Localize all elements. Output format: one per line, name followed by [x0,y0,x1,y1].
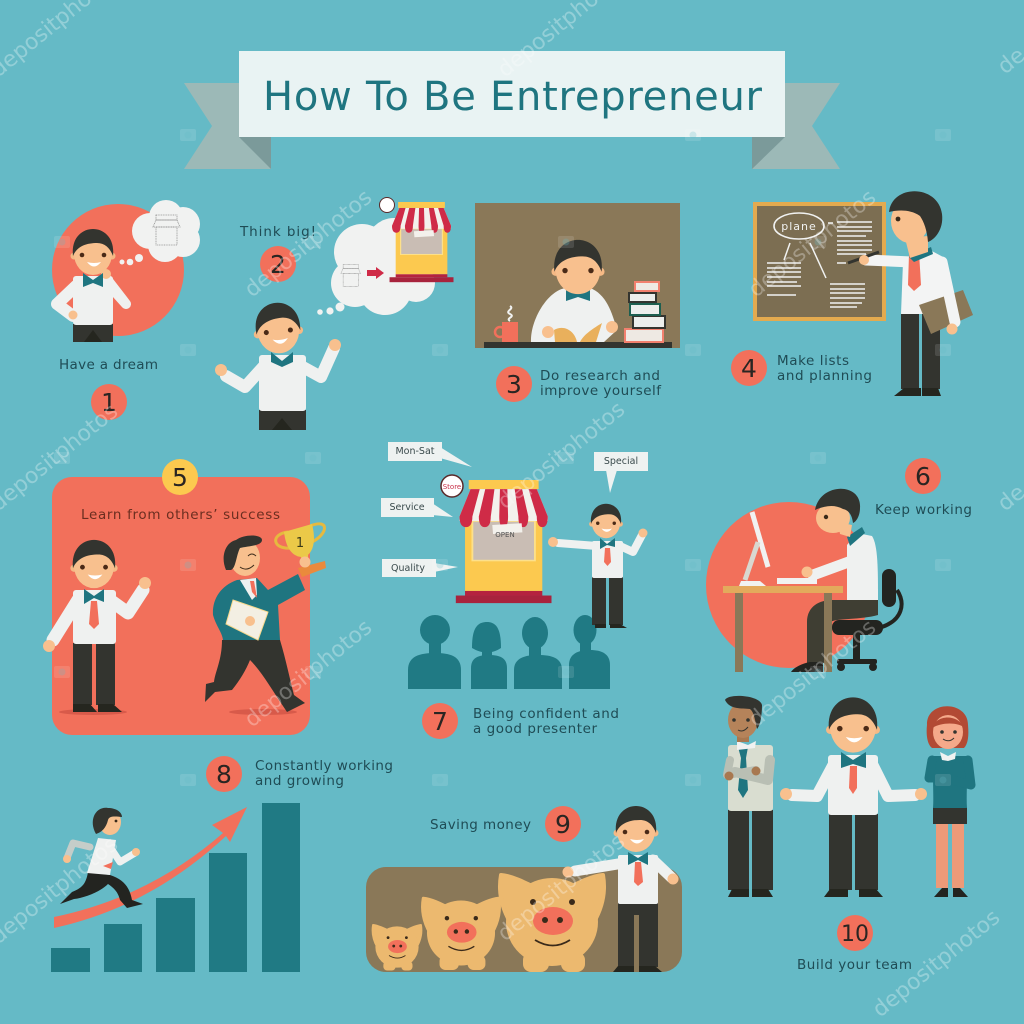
callouts: Special [604,456,638,467]
step 8: working and growing [51,756,393,972]
caption: Learn from others’ success [81,507,280,523]
person running with trophy [205,524,326,712]
chair [832,569,902,671]
number 3 [496,366,532,402]
caption: Saving money [430,817,531,833]
callouts [381,442,648,577]
books [625,282,665,342]
number 6: 6 [915,462,931,491]
number 4: 4 [741,354,757,383]
coffee cup [495,306,518,342]
thought cloud [120,200,200,265]
desk [723,586,843,672]
step 7: confident presenter: a good presenter [473,721,597,737]
caption: Constantly working [255,758,393,774]
step 3: research: improve yourself [540,383,662,399]
step 3: research [475,203,680,402]
number 8 [206,756,242,792]
number 10: 10 [841,922,869,947]
caption: Keep working [875,502,972,518]
number 10 [837,915,873,951]
cloud with shops [317,218,435,315]
number 5 [162,459,198,495]
caption: Make lists [777,353,849,369]
step 9: saving money [366,806,682,972]
piggy banks [373,875,604,972]
step 10: build your team [724,696,971,973]
step 1: have a dream [52,200,200,420]
shop: Store [443,483,461,491]
caption: Do research and [540,368,660,384]
number 4 [731,350,767,386]
step 4: lists and planning [731,191,973,396]
audience [408,615,610,689]
title ribbon [184,51,840,169]
computer [739,512,817,586]
caption: Build your team [797,957,912,973]
watermark: depositphotos [240,185,377,303]
step 4: lists and planning: and planning [777,368,872,384]
number 9: 9 [555,810,571,839]
person standing [43,540,151,712]
step 7: confident presenter [381,442,648,739]
watermark: depositphotos [240,615,377,733]
number 1: 1 [101,388,117,417]
trophy: 1 [296,536,304,551]
central man [780,697,927,897]
bar chart [51,803,300,972]
shop [441,475,552,603]
watermark: depositphotos [744,615,881,733]
board content [767,213,872,307]
person [562,806,678,972]
number 1 [91,384,127,420]
step 8: working and growing: and growing [255,773,344,789]
presenter [548,504,648,628]
callouts: Service [389,502,425,513]
number 7 [422,703,458,739]
caption: Being confident and [473,706,619,722]
caption: Think big! [239,224,316,240]
step 5: learn from others' success [43,459,326,735]
shop: OPEN [495,531,515,539]
watermark: depositphotos [744,185,881,303]
runner [60,808,143,908]
number 6 [905,458,941,494]
woman [927,706,971,897]
title: How To Be Entrepreneur [263,74,763,120]
man with crossed arms [724,696,773,897]
callouts: Quality [391,563,425,574]
number 5: 5 [172,463,188,492]
number 2: 2 [270,250,286,279]
number 7: 7 [432,707,448,736]
number 2 [260,246,296,282]
number 9 [545,806,581,842]
step 2: think big [215,198,454,430]
step 6: keep working [706,458,972,672]
number 8: 8 [216,760,232,789]
watermark: depositphotos [493,397,630,515]
watermark: depositphotos [493,829,630,947]
callouts: Mon-Sat [395,446,435,457]
number 3: 3 [506,370,522,399]
caption: Have a dream [59,357,158,373]
growth arrow [54,807,247,928]
watermark: depositphotos [868,905,1005,1023]
board content: plane [781,220,817,233]
trophy [276,524,326,577]
